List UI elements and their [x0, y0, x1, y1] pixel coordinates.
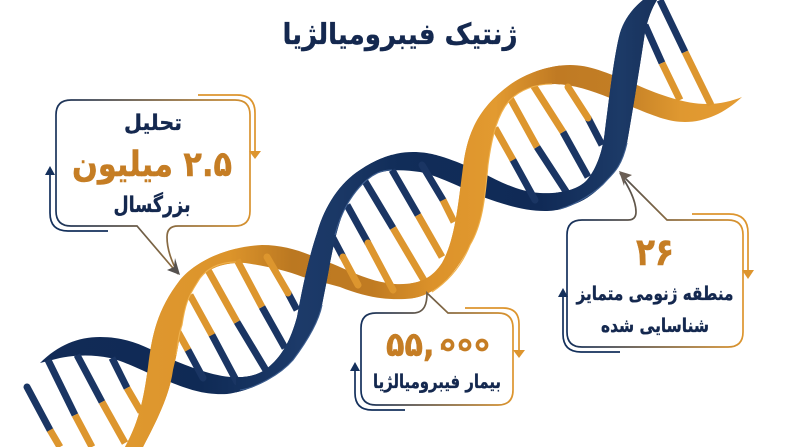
- callout: 2.5 million adults: بزرگسال: [114, 191, 190, 218]
- callout outline: [567, 173, 743, 347]
- callout: 55,000 patients: [350, 293, 525, 410]
- ring-shaped zeros: [443, 340, 487, 350]
- orange return arrow: [465, 308, 525, 358]
- callout outline: [361, 293, 513, 405]
- pointer arrowhead: [167, 258, 180, 275]
- navy return arrow: [558, 288, 620, 352]
- orange return arrow: [198, 95, 261, 159]
- navy return arrow: [45, 166, 108, 231]
- callout: 26 genomic regions: شناسایی شده: [601, 315, 709, 337]
- rear navy strand: [40, 0, 657, 394]
- callout outline: [56, 100, 250, 274]
- callout text: تحلیل: [124, 111, 182, 136]
- navy return arrow: [350, 362, 405, 410]
- callout: 2.5 million adults: [45, 95, 261, 275]
- callout text: ۵۵,۰۰۰: [386, 325, 490, 365]
- rear orange strand: [125, 65, 742, 447]
- callout text: ۲۶: [636, 230, 674, 274]
- front navy strand segments: [236, 0, 657, 392]
- orange return arrow: [692, 214, 754, 279]
- callout: 26 genomic regions: [558, 171, 754, 352]
- callout: 26 genomic regions: منطقه ژنومی متمایز: [576, 283, 734, 305]
- callout: 55,000 patients: بیمار فیبرومیالژیا: [373, 371, 501, 393]
- front orange strand segments: [125, 66, 560, 447]
- title: ژنتیک فیبرومیالژیا: [282, 17, 518, 51]
- ribbon edge highlights: [176, 84, 627, 390]
- pointer arrowhead: [619, 171, 632, 186]
- callout: 2.5 million adults: ۲.۵ میلیون: [72, 145, 232, 185]
